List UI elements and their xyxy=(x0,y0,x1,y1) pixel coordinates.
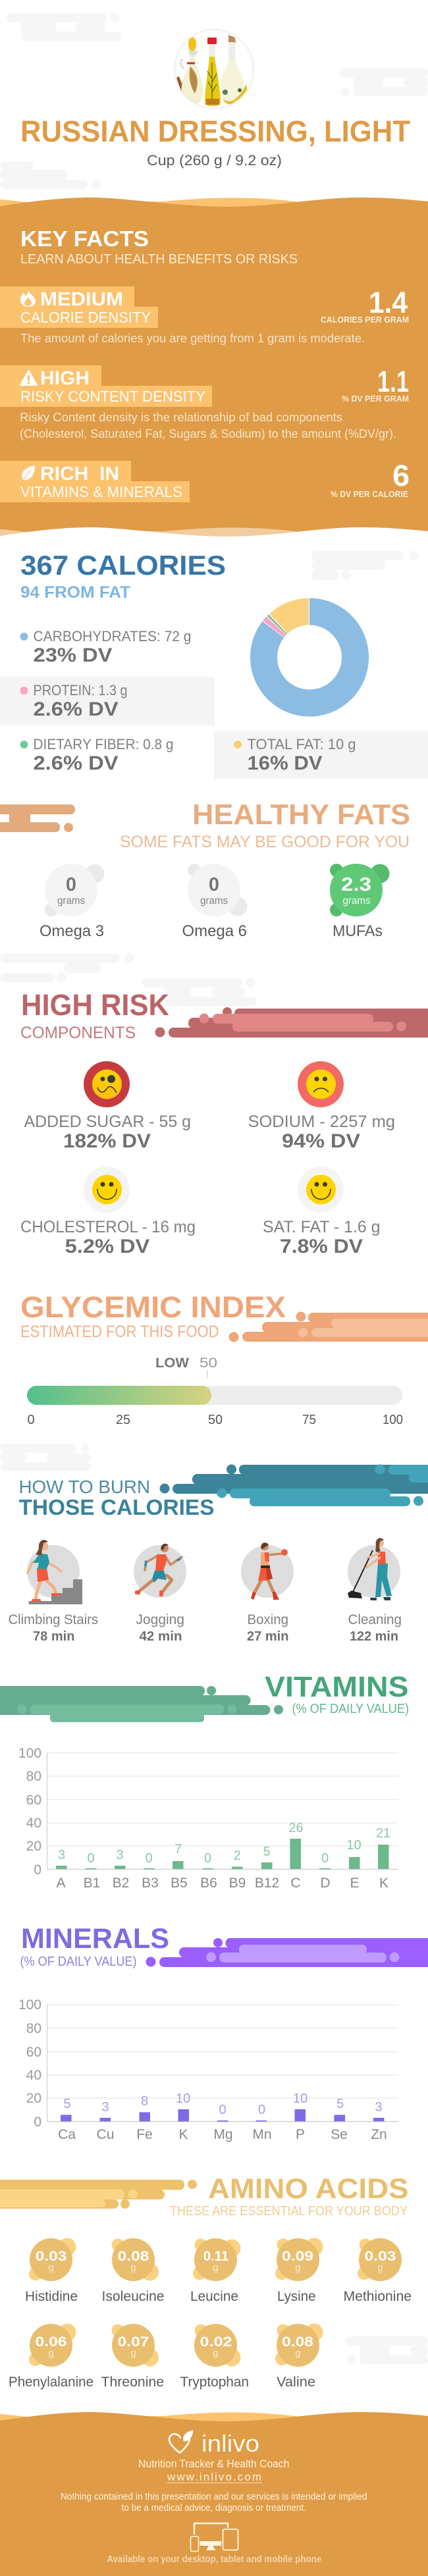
risky content density block xyxy=(0,365,409,440)
bar chart: minerals: 0 xyxy=(258,2103,265,2117)
bubble: leucine: Leucine xyxy=(190,2289,238,2304)
bubble: mufas: 2.3 xyxy=(341,874,371,895)
serving size: Cup (260 g / 9.2 oz) xyxy=(147,152,282,169)
panel: amino acids xyxy=(0,2173,412,2390)
legend: total fat xyxy=(234,736,356,774)
bar chart: vitamins: B3 xyxy=(142,1876,159,1891)
bar chart: vitamins: 3 xyxy=(116,1848,124,1862)
bubble: valine xyxy=(275,2324,323,2390)
panel: how to burn calories xyxy=(8,1464,428,1644)
item: added sugar: ADDED SUGAR - 55 g xyxy=(24,1113,191,1131)
bubble: isoleucine xyxy=(101,2238,165,2304)
description: The amount of calories you are getting from 1 gram is moderate. xyxy=(20,332,365,345)
bar chart: minerals: Zn xyxy=(371,2127,387,2142)
decorative banner xyxy=(0,1686,283,1722)
disclaimer xyxy=(61,2491,367,2513)
bar chart: minerals: K xyxy=(178,2127,188,2142)
bubble: mufas xyxy=(330,864,390,940)
gauge value label xyxy=(155,1355,217,1378)
activity: cleaning: Cleaning xyxy=(348,1612,402,1627)
bar chart: minerals: 0 xyxy=(34,2115,41,2130)
activity: climbing stairs: Climbing Stairs xyxy=(8,1612,98,1627)
bubble: omega 6: grams xyxy=(200,895,228,907)
bar chart: vitamins: 80 xyxy=(26,1769,41,1784)
activity: climbing stairs: 78 min xyxy=(33,1629,75,1644)
bar chart: minerals: Cu xyxy=(97,2127,114,2142)
bar chart: minerals: Mn xyxy=(252,2127,272,2142)
gauge scale: 75 xyxy=(302,1413,316,1427)
legend: total fat: TOTAL FAT: 10 g xyxy=(248,736,356,752)
decorative banner xyxy=(0,804,75,832)
item: saturated fat: SAT. FAT - 1.6 g xyxy=(263,1218,381,1236)
donut chart xyxy=(250,598,369,716)
activity: climbing stairs xyxy=(8,1540,98,1644)
activity: boxing xyxy=(241,1542,294,1644)
bubble: histidine xyxy=(25,2238,78,2304)
subheading: components: COMPONENTS xyxy=(20,1024,136,1042)
title: RUSSIAN DRESSING, LIGHT xyxy=(20,115,410,148)
bubble: methionine xyxy=(344,2238,412,2304)
bar chart: vitamins: 0 xyxy=(145,1851,153,1866)
description xyxy=(20,411,396,440)
logo wordmark: inlivo xyxy=(201,2430,259,2457)
bar chart: vitamins: E xyxy=(350,1876,360,1891)
decorative banner xyxy=(159,1464,428,1506)
legend: protein: 2.6% DV xyxy=(33,698,119,720)
unit: percent dv per calorie: % DV PER CALORIE xyxy=(331,489,408,499)
bar chart: vitamins: 60 xyxy=(26,1793,41,1808)
disclaimer: Nothing contained in this presentation and our services is intended or implied xyxy=(61,2491,367,2502)
website link: www.inlivo.com xyxy=(167,2471,261,2483)
gauge scale xyxy=(28,1413,403,1427)
item: saturated fat: 7.8% DV xyxy=(280,1236,363,1257)
bar chart: minerals: Se xyxy=(331,2127,348,2142)
panel: vitamins xyxy=(0,1671,409,1891)
bar chart: minerals: 3 xyxy=(101,2100,109,2115)
bar chart: vitamins: 40 xyxy=(26,1816,41,1831)
bar chart: minerals: Ca xyxy=(58,2127,76,2142)
description: (Cholesterol, Saturated Fat, Sugars & Sodium) to the amount (%DV/gr). xyxy=(20,427,396,440)
bar chart: vitamins: 2 xyxy=(233,1849,241,1863)
bar chart: vitamins: B2 xyxy=(113,1876,129,1891)
label: vitamins and minerals: VITAMINS & MINERALS xyxy=(20,483,182,500)
bubble: omega 3: grams xyxy=(57,895,85,907)
item: saturated fat xyxy=(263,1167,381,1257)
bar chart: vitamins: B5 xyxy=(171,1876,188,1891)
bar chart: minerals: 8 xyxy=(141,2094,148,2109)
bar chart: minerals: 40 xyxy=(26,2068,41,2083)
item: sodium: 94% DV xyxy=(282,1130,360,1152)
heading: glycemic index: GLYCEMIC INDEX xyxy=(20,1290,286,1324)
activity: boxing: 27 min xyxy=(247,1629,288,1644)
gauge scale: 100 xyxy=(383,1413,403,1427)
bubble: threonine: g xyxy=(130,2348,136,2359)
bar chart: vitamins: B12 xyxy=(255,1876,279,1891)
subheading: 94 from fat: 94 FROM FAT xyxy=(20,583,130,602)
activity: cleaning: 122 min xyxy=(350,1629,398,1644)
bubble: methionine: g xyxy=(377,2262,383,2273)
bubble: omega 6 xyxy=(182,864,248,940)
bar chart: vitamins xyxy=(18,1746,398,1891)
header xyxy=(20,30,410,169)
bar chart: minerals: Mg xyxy=(213,2127,233,2142)
bubble: phenylalanine: 0.06 xyxy=(36,2334,67,2350)
heading: minerals: MINERALS xyxy=(21,1923,169,1955)
availability note: Available on your desktop, tablet and mobile phone xyxy=(107,2554,321,2565)
label: rich in: RICH IN xyxy=(40,463,119,485)
bubble: mufas: grams xyxy=(342,895,370,907)
bar chart: vitamins: 0 xyxy=(87,1851,95,1866)
subheading: (% OF DAILY VALUE) xyxy=(292,1702,409,1716)
bubble: omega 6: 0 xyxy=(209,874,219,895)
legend: dietary fiber xyxy=(20,736,174,774)
bubble: phenylalanine xyxy=(9,2324,94,2390)
icon: devices xyxy=(191,2523,238,2552)
heading: amino acids: AMINO ACIDS xyxy=(208,2173,408,2205)
bar chart: minerals xyxy=(18,1997,398,2142)
bubble: tryptophan: 0.02 xyxy=(200,2334,232,2350)
bubble: leucine: 0.11 xyxy=(203,2249,229,2264)
icon: inlivo heart logo xyxy=(169,2431,193,2453)
activity: jogging: 42 min xyxy=(140,1629,182,1644)
activity: jogging xyxy=(134,1544,186,1644)
gauge value label: 50 xyxy=(200,1355,217,1371)
bar chart: vitamins: B1 xyxy=(84,1876,100,1891)
bar chart: minerals: 80 xyxy=(26,2021,41,2036)
heading: high risk: HIGH RISK xyxy=(21,988,169,1022)
bar chart: vitamins: 0 xyxy=(34,1862,41,1878)
bar chart: vitamins: B6 xyxy=(200,1876,217,1891)
icon: dressing bottles photo xyxy=(174,30,254,109)
activity: jogging: Jogging xyxy=(136,1612,184,1627)
label: risky content density: RISKY CONTENT DENSITY xyxy=(20,388,205,405)
bar chart: minerals: 10 xyxy=(176,2091,190,2106)
heading: those calories: THOSE CALORIES xyxy=(18,1495,215,1519)
legend: protein xyxy=(20,682,128,720)
bubble: histidine: g xyxy=(48,2262,54,2273)
item: added sugar: 182% DV xyxy=(63,1130,151,1152)
activity: cleaning xyxy=(348,1538,402,1644)
icon: warning xyxy=(20,371,37,385)
gauge bar xyxy=(27,1386,402,1405)
bubble: tryptophan: g xyxy=(213,2348,219,2359)
heading: how to burn: HOW TO BURN xyxy=(18,1477,150,1497)
bubble: valine: Valine xyxy=(277,2375,315,2390)
bubble: histidine: 0.03 xyxy=(36,2249,67,2264)
gauge value label: LOW xyxy=(155,1355,189,1371)
legend: carbohydrates xyxy=(20,628,191,666)
bar chart: vitamins: 100 xyxy=(18,1746,41,1761)
bar chart: minerals: 10 xyxy=(293,2091,308,2106)
value: 6: 6 xyxy=(392,459,410,492)
bubble: lysine: 0.09 xyxy=(282,2249,313,2264)
label: high: HIGH xyxy=(40,368,90,389)
bar chart: minerals: 5 xyxy=(336,2097,344,2111)
tagline: Nutrition Tracker & Health Coach xyxy=(138,2458,290,2470)
panel: high risk components xyxy=(20,988,428,1257)
subheading: SOME FATS MAY BE GOOD FOR YOU xyxy=(120,833,410,851)
legend: protein: PROTEIN: 1.3 g xyxy=(33,682,128,698)
value: 1.4: 1.4 xyxy=(369,286,408,319)
legend: total fat: 16% DV xyxy=(248,752,323,774)
bar chart: minerals: 60 xyxy=(26,2045,41,2060)
panel: key facts xyxy=(0,197,428,538)
legend: carbohydrates: CARBOHYDRATES: 72 g xyxy=(33,628,191,644)
bubble: methionine: 0.03 xyxy=(365,2249,396,2264)
bubble: lysine xyxy=(275,2238,323,2304)
item: cholesterol: 5.2% DV xyxy=(65,1236,149,1257)
bubble: threonine xyxy=(101,2324,164,2390)
bubble: omega 6: Omega 6 xyxy=(182,922,247,940)
bubble: leucine: g xyxy=(213,2262,219,2273)
gauge scale: 50 xyxy=(208,1413,223,1427)
panel: glycemic index xyxy=(20,1290,428,1427)
bar chart: vitamins: 21 xyxy=(376,1826,390,1841)
bubble: lysine: Lysine xyxy=(277,2289,316,2304)
subheading: ESTIMATED FOR THIS FOOD xyxy=(20,1323,219,1341)
legend: dietary fiber: DIETARY FIBER: 0.8 g xyxy=(33,736,174,752)
row highlights xyxy=(0,677,428,779)
heading: 367 calories: 367 CALORIES xyxy=(20,550,226,581)
panel: minerals xyxy=(18,1923,428,2142)
bar chart: vitamins: 20 xyxy=(26,1839,41,1854)
bar chart: vitamins: 5 xyxy=(263,1845,271,1859)
bar chart: minerals: 20 xyxy=(26,2091,41,2106)
decorative banner xyxy=(229,1311,428,1342)
subheading: THESE ARE ESSENTIAL FOR YOUR BODY xyxy=(170,2204,408,2219)
decorative banner xyxy=(146,1938,428,1967)
bar chart: vitamins: K xyxy=(379,1876,388,1891)
bubble: isoleucine: g xyxy=(130,2262,136,2273)
item: sodium: SODIUM - 2257 mg xyxy=(248,1113,395,1131)
subheading: (% OF DAILY VALUE) xyxy=(20,1955,137,1969)
bubble: mufas: MUFAs xyxy=(333,922,383,940)
heading: healthy fats: HEALTHY FATS xyxy=(192,799,410,831)
decorative banner xyxy=(155,1007,428,1038)
bubble: isoleucine: 0.08 xyxy=(117,2249,149,2264)
gauge scale: 0 xyxy=(28,1413,35,1427)
value: 1.1: 1.1 xyxy=(377,365,409,398)
heading: vitamins: VITAMINS xyxy=(265,1671,408,1703)
bar chart: vitamins: B9 xyxy=(229,1876,246,1891)
item: cholesterol: CHOLESTEROL - 16 mg xyxy=(20,1218,196,1236)
gauge scale: 25 xyxy=(116,1413,130,1427)
unit: calories per gram: CALORIES PER GRAM xyxy=(321,315,409,325)
rich in block xyxy=(0,459,410,502)
item: added sugar xyxy=(24,1061,191,1152)
legend: dietary fiber: 2.6% DV xyxy=(33,752,119,774)
item: sodium xyxy=(248,1061,395,1152)
bar chart: vitamins: 26 xyxy=(288,1821,304,1835)
bubble: omega 3: Omega 3 xyxy=(40,922,104,940)
calorie density block xyxy=(0,286,409,345)
bubble: valine: g xyxy=(295,2348,301,2359)
bubble: phenylalanine: Phenylalanine xyxy=(9,2375,94,2390)
icon: leaf xyxy=(22,465,35,480)
bar chart: vitamins: C xyxy=(290,1876,301,1891)
bar chart: vitamins: 7 xyxy=(174,1842,182,1856)
bar chart: minerals: Fe xyxy=(136,2127,153,2142)
label: calorie density: CALORIE DENSITY xyxy=(20,309,151,326)
bubble: phenylalanine: g xyxy=(48,2348,54,2359)
bubble: omega 3: 0 xyxy=(66,874,76,895)
bubble: omega 3 xyxy=(40,864,104,940)
bubble: tryptophan: Tryptophan xyxy=(180,2375,249,2390)
icon: flame xyxy=(20,290,36,307)
label: medium: MEDIUM xyxy=(40,289,123,310)
bar chart: minerals: 3 xyxy=(375,2100,383,2115)
bar chart: vitamins: D xyxy=(320,1876,331,1891)
bar chart: minerals: 5 xyxy=(63,2097,71,2111)
bubble: methionine: Methionine xyxy=(344,2289,412,2304)
panel: calories xyxy=(0,550,428,779)
bar chart: minerals: 0 xyxy=(219,2103,227,2117)
heading: key facts: KEY FACTS xyxy=(20,226,149,251)
unit: percent dv per gram: % DV PER GRAM xyxy=(342,394,409,404)
bubble: threonine: Threonine xyxy=(101,2375,164,2390)
bubble: valine: 0.08 xyxy=(282,2334,313,2350)
bubble: leucine xyxy=(190,2238,241,2304)
bar chart: vitamins: A xyxy=(56,1876,66,1891)
bubble: histidine: Histidine xyxy=(25,2289,78,2304)
activity: boxing: Boxing xyxy=(248,1612,288,1627)
bar chart: minerals: 100 xyxy=(18,1997,41,2012)
legend: carbohydrates: 23% DV xyxy=(33,644,112,666)
bubble: isoleucine: Isoleucine xyxy=(101,2289,165,2304)
bubble: tryptophan xyxy=(180,2324,249,2390)
footer xyxy=(0,2412,428,2576)
bubble: lysine: g xyxy=(295,2262,301,2273)
description: Risky Content density is the relationship of bad components xyxy=(20,411,342,424)
bubble: threonine: 0.07 xyxy=(117,2334,149,2350)
bar chart: vitamins: 0 xyxy=(321,1851,329,1866)
bar chart: vitamins: 3 xyxy=(58,1848,65,1862)
item: cholesterol xyxy=(20,1167,196,1257)
bar chart: vitamins: 0 xyxy=(204,1851,211,1866)
subheading: key facts: LEARN ABOUT HEALTH BENEFITS OR RISKS xyxy=(20,252,298,267)
panel: healthy fats xyxy=(0,799,410,940)
bar chart: vitamins: 10 xyxy=(346,1838,361,1853)
bar chart: minerals: P xyxy=(296,2127,305,2142)
decorative banner xyxy=(0,2180,197,2209)
disclaimer: to be a medical advice, diagnosis or treatment. xyxy=(121,2502,306,2513)
